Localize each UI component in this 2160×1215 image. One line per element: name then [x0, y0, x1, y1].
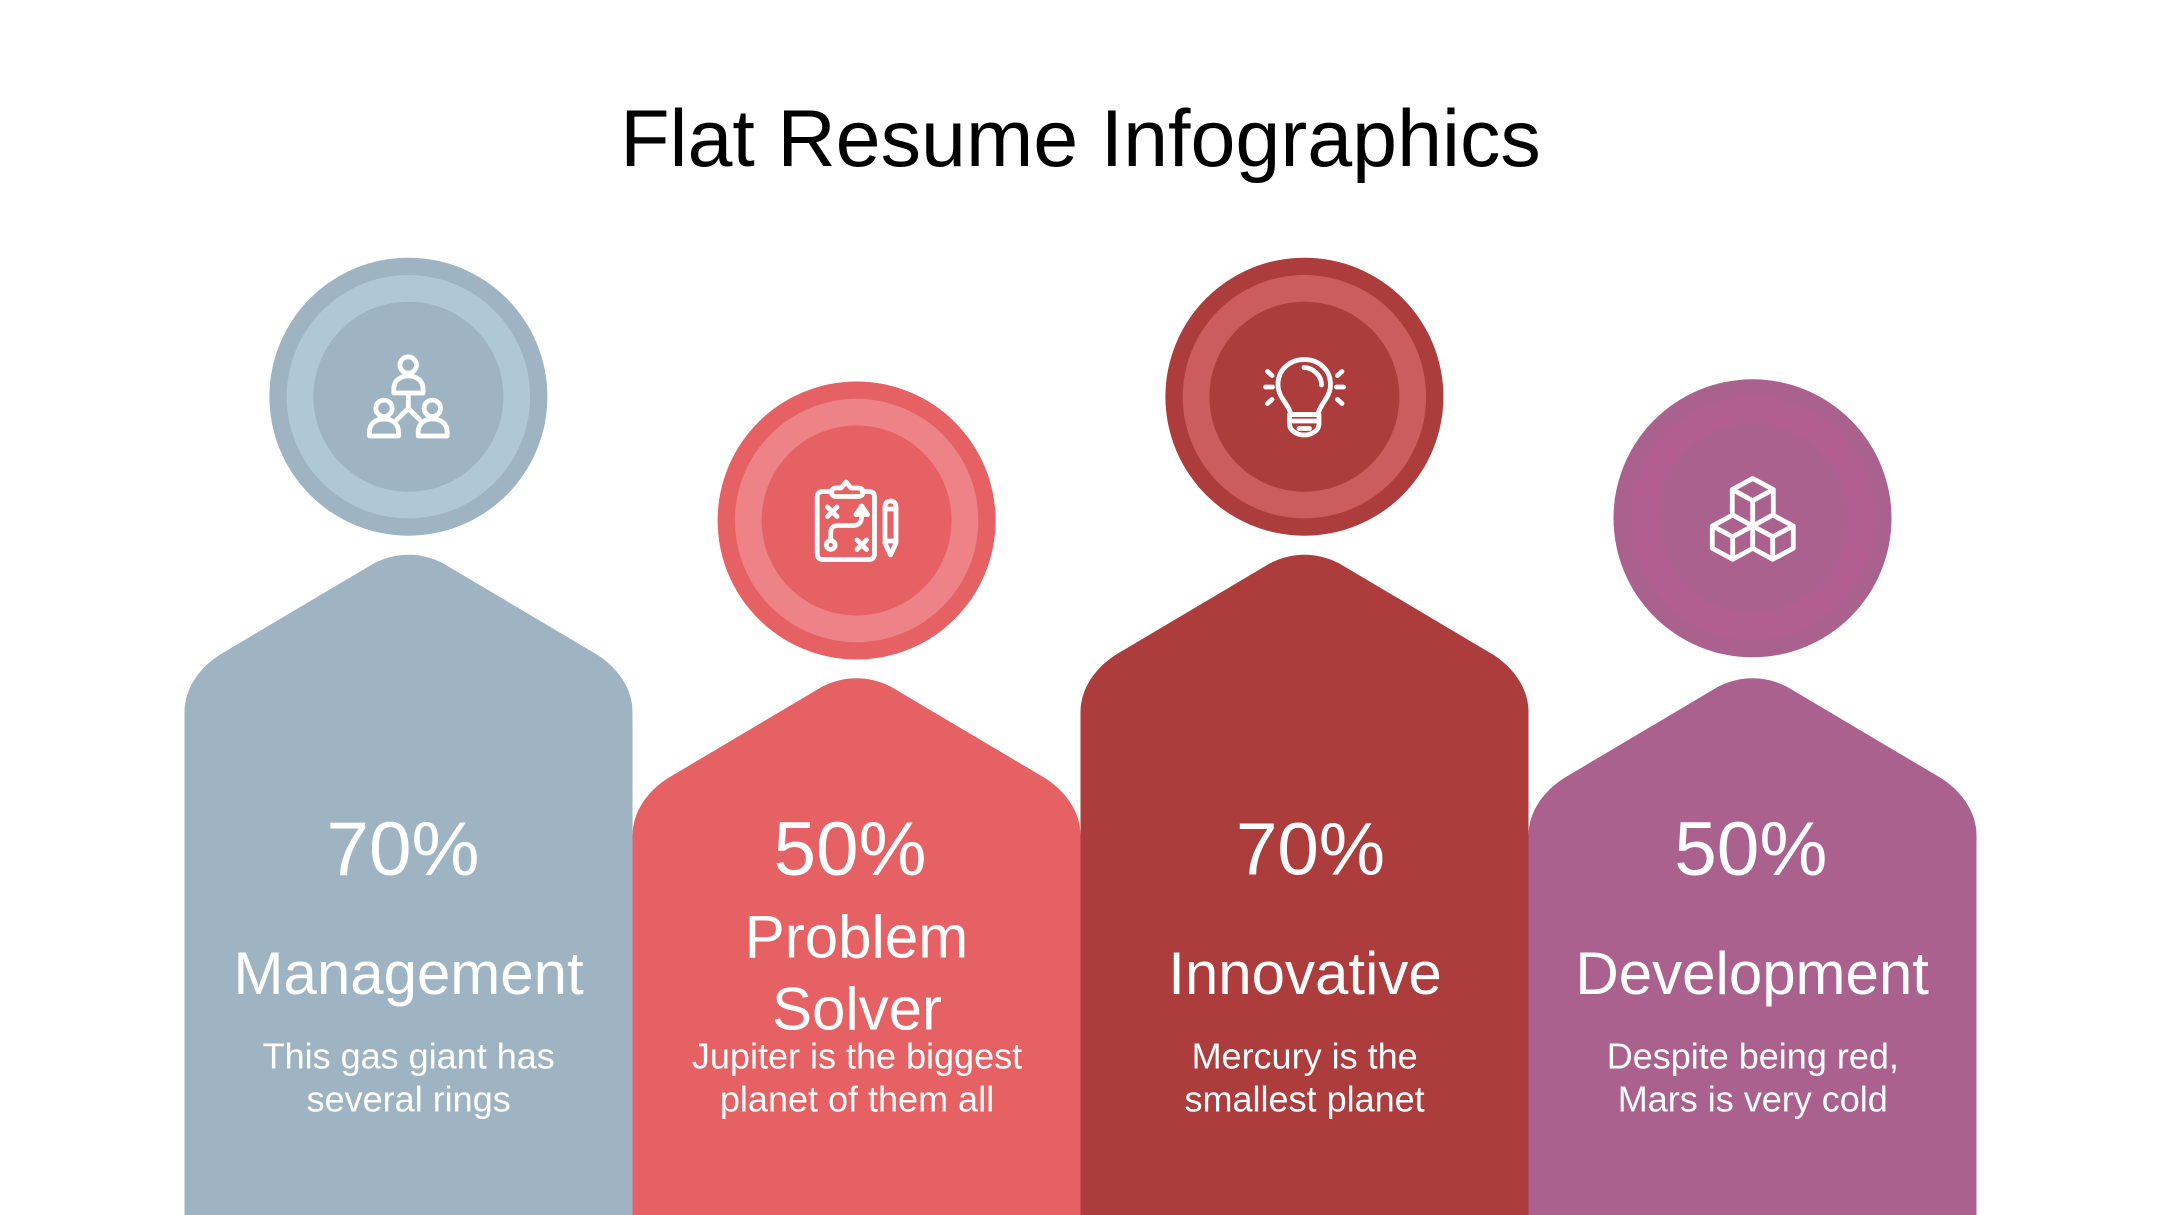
description: problem solver: planet of them all [720, 1079, 994, 1120]
description: development: Mars is very cold [1618, 1079, 1888, 1120]
heading: Management: Management [233, 940, 584, 1007]
percentage: 50%: 50% [773, 807, 927, 892]
description: development: Despite being red, [1607, 1035, 1899, 1076]
heading: Innovative: Innovative [1168, 940, 1442, 1007]
pentagon body: management [184, 555, 632, 1215]
pentagon body: development [1528, 678, 1976, 1215]
panel: problem solver [632, 382, 1080, 1215]
badge: innovative [1165, 258, 1443, 536]
percentage: 70%: 70% [1236, 808, 1385, 890]
heading second line: Solver: Solver [772, 976, 942, 1043]
description: management: several rings [307, 1079, 511, 1120]
icon: stacked cubes [1712, 478, 1793, 559]
pentagon body: problem solver [632, 678, 1080, 1215]
badge: management [269, 258, 547, 536]
icon: light bulb [1266, 360, 1344, 435]
heading: Problem Solver: Problem [745, 904, 968, 970]
panel: development [1528, 379, 1976, 1215]
description: innovative: smallest planet [1185, 1079, 1425, 1120]
icon: strategy clipboard and pencil [817, 482, 896, 560]
badge: problem solver [718, 382, 996, 660]
pentagon body: innovative [1080, 555, 1528, 1215]
icon: team hierarchy [370, 357, 447, 436]
panel: management [184, 258, 632, 1215]
panel: innovative [1080, 258, 1528, 1215]
percentage: 70%: 70% [326, 807, 480, 892]
badge: development [1614, 379, 1892, 657]
heading: Development: Development [1575, 940, 1929, 1007]
percentage: 50%: 50% [1674, 807, 1827, 892]
description: problem solver: Jupiter is the biggest [692, 1035, 1022, 1076]
description: innovative: Mercury is the [1192, 1035, 1418, 1076]
title: Flat Resume Infographics [620, 94, 1541, 184]
description: management: This gas giant has [263, 1035, 555, 1076]
